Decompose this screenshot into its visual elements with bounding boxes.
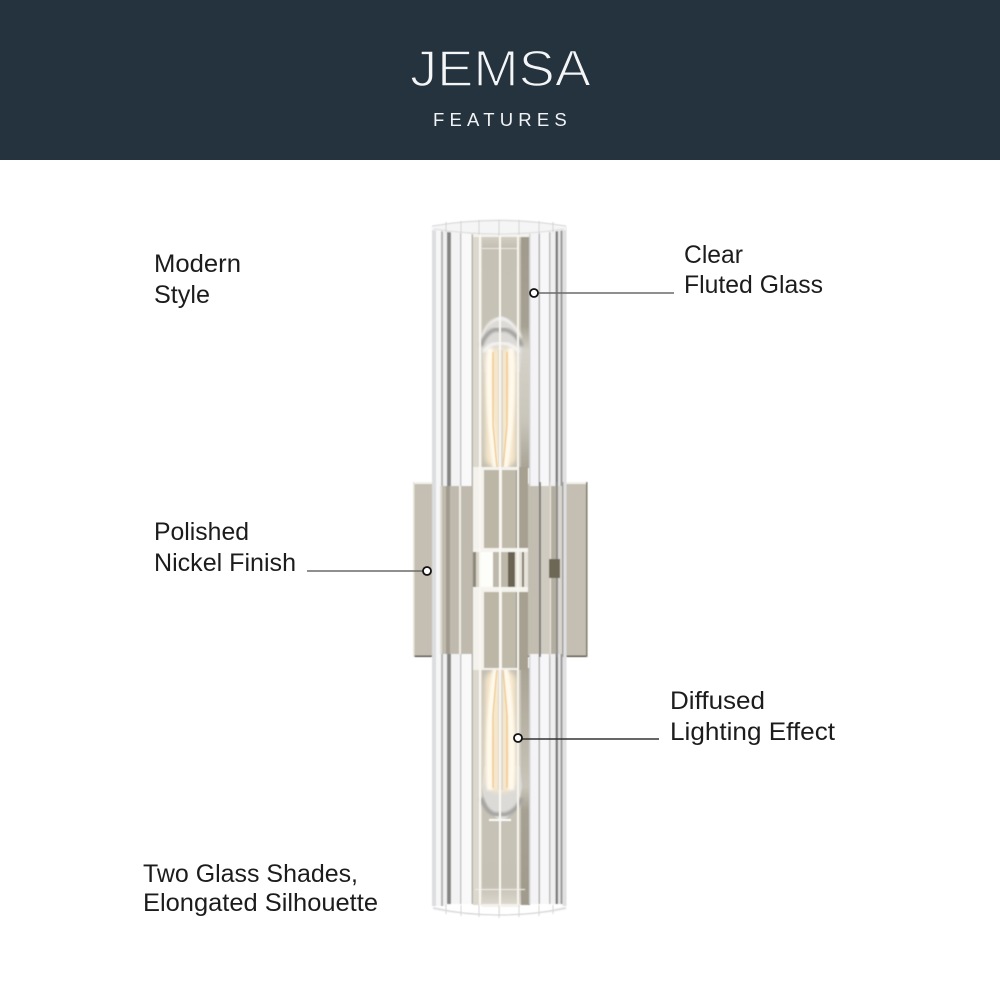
backplate — [413, 482, 588, 657]
upper inner tube — [473, 232, 529, 468]
label: Diffused Lighting Effect: Lighting Effect — [670, 718, 835, 746]
label: Clear Fluted Glass — [684, 241, 823, 299]
label: Clear Fluted Glass: Clear — [684, 241, 743, 269]
label: Diffused Lighting Effect: Diffused — [670, 687, 765, 715]
wall sconce product image — [413, 219, 588, 918]
backplate seen through left of glass — [440, 486, 472, 654]
label: Polished Nickel Finish: Nickel Finish — [154, 549, 296, 577]
top rim of glass — [432, 219, 566, 236]
label: Two Glass Shades, Elongated Silhouette: Two Glass Shades, — [143, 860, 358, 888]
label: Modern Style: Style — [154, 281, 210, 309]
callout: polished nickel finish — [307, 567, 431, 575]
subtitle: FEATURES — [433, 109, 572, 130]
callout: clear fluted glass — [530, 289, 674, 297]
label: Polished Nickel Finish — [154, 518, 296, 577]
lower bulb — [481, 668, 522, 820]
label: Polished Nickel Finish: Polished — [154, 518, 249, 546]
label: Modern Style — [154, 250, 241, 309]
fluted glass stripes — [432, 224, 566, 916]
bottom rim of glass — [433, 905, 566, 918]
header band — [0, 0, 1000, 160]
upper bulb — [481, 316, 522, 468]
collar — [472, 549, 528, 590]
backplate seen through right of glass — [528, 482, 564, 657]
title: JEMSA — [410, 40, 591, 97]
callout: diffused lighting effect — [514, 734, 659, 742]
label: Two Glass Shades, Elongated Silhouette — [143, 860, 378, 917]
label: Diffused Lighting Effect — [670, 687, 835, 746]
central metal body — [472, 467, 528, 670]
label: Clear Fluted Glass: Fluted Glass — [684, 271, 823, 299]
label: Two Glass Shades, Elongated Silhouette: Elongated Silhouette — [143, 889, 378, 917]
lower inner tube — [473, 668, 530, 907]
label: Modern Style: Modern — [154, 250, 241, 278]
